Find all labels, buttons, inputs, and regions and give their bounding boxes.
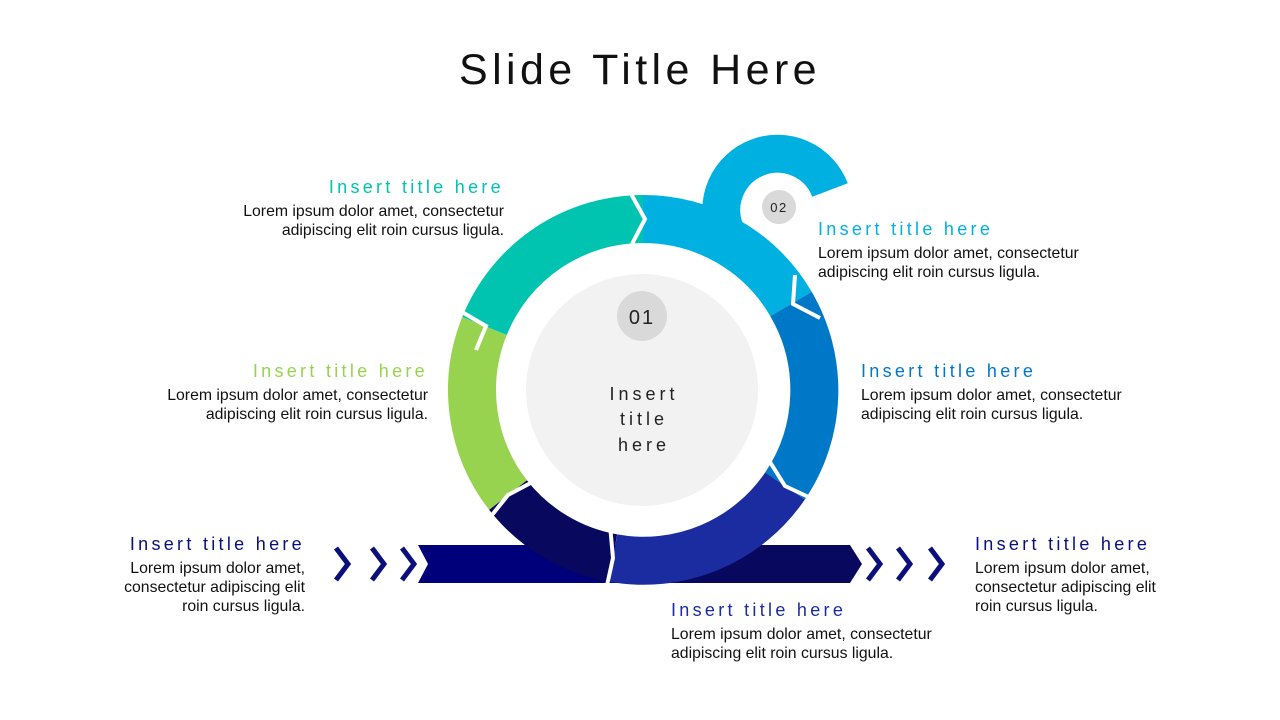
bottom bar: [336, 545, 942, 583]
navy left text: [124, 534, 305, 615]
navy right text: Insert title here: [975, 534, 1150, 554]
center text: here: [618, 435, 670, 455]
navy right text: roin cursus ligula.: [975, 598, 1098, 615]
badge 02: 02: [770, 200, 788, 215]
navy right text: Lorem ipsum dolor amet,: [975, 560, 1150, 577]
navy left text: roin cursus ligula.: [182, 598, 305, 615]
center text: [609, 384, 679, 455]
royal blue bottom text: Lorem ipsum dolor amet, consectetur: [671, 626, 932, 643]
navy left text: consectetur adipiscing elit: [124, 579, 305, 596]
green text: Lorem ipsum dolor amet, consectetur: [167, 387, 428, 404]
green text: [167, 361, 428, 423]
title: Slide Title Here: [459, 46, 821, 94]
blue text: adipiscing elit roin cursus ligula.: [861, 406, 1083, 423]
teal text: [243, 177, 504, 239]
light blue text: adipiscing elit roin cursus ligula.: [818, 264, 1040, 281]
badge 01: 01: [629, 307, 655, 329]
royal blue bottom text: Insert title here: [671, 600, 846, 620]
navy left text: Lorem ipsum dolor amet,: [130, 560, 305, 577]
center text: Insert: [609, 384, 679, 404]
light blue text: [818, 219, 1079, 281]
green text: Insert title here: [253, 361, 428, 381]
navy left text: Insert title here: [130, 534, 305, 554]
teal text: Lorem ipsum dolor amet, consectetur: [243, 203, 504, 220]
navy right text: consectetur adipiscing elit: [975, 579, 1156, 596]
light blue text: Insert title here: [818, 219, 993, 239]
ring: [462, 154, 830, 590]
inner circle: [497, 244, 789, 536]
teal text: adipiscing elit roin cursus ligula.: [282, 222, 504, 239]
green text: adipiscing elit roin cursus ligula.: [206, 406, 428, 423]
light blue text: Lorem ipsum dolor amet, consectetur: [818, 245, 1079, 262]
blue text: Lorem ipsum dolor amet, consectetur: [861, 387, 1122, 404]
navy right text: [975, 534, 1156, 615]
blue text: [861, 361, 1122, 423]
badge 02: [762, 190, 796, 224]
center text: title: [620, 409, 668, 429]
royal blue bottom text: [671, 600, 932, 662]
badge 01: [617, 291, 667, 341]
blue text: Insert title here: [861, 361, 1036, 381]
royal blue bottom text: adipiscing elit roin cursus ligula.: [671, 645, 893, 662]
teal text: Insert title here: [329, 177, 504, 197]
